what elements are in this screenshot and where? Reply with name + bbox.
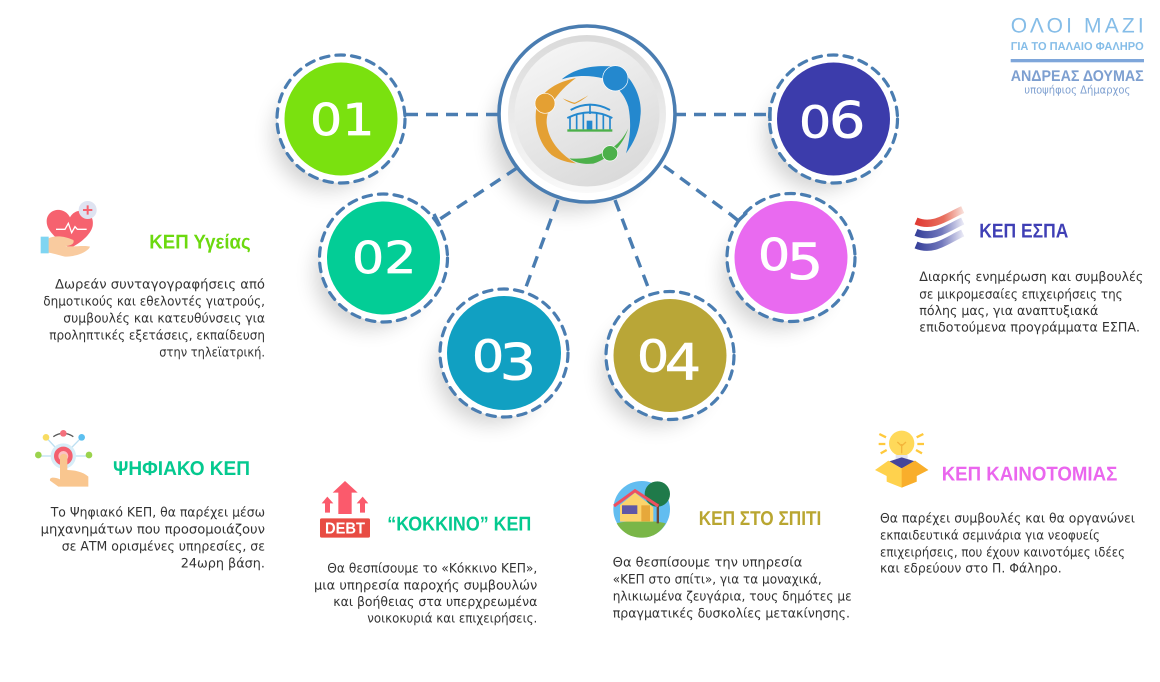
number circle 05: 5 — [787, 233, 823, 291]
text block: πραγματικές δυσκολίες μετακίνησης. — [613, 606, 850, 621]
number circle 04 — [606, 292, 734, 420]
panel: ΚΕΠ ΚΑΙΝΟΤΟΜΙΑΣ — [875, 431, 1135, 577]
central emblem — [499, 26, 675, 202]
text block: μια υπηρεσία παροχής συμβουλών — [314, 578, 537, 593]
panel: ΚΕΠ ΕΣΠΑ — [916, 210, 1143, 336]
heading: ΚΕΠ ΣΤΟ ΣΠΙΤΙ — [699, 508, 821, 530]
icon: finger touching network — [35, 430, 92, 487]
text block: μηχανημάτων που προσομοιάζουν — [41, 522, 265, 538]
icon: house — [613, 481, 670, 538]
icon: debt arrows: DEBT — [325, 520, 365, 537]
number circle 04: 0 — [637, 332, 669, 383]
logo: campaign signature: ΟΛΟΙ ΜΑΖΙ — [1011, 15, 1144, 38]
text block: Διαρκής ενημέρωση και συμβουλές — [919, 270, 1143, 285]
number circle 04: 4 — [665, 334, 701, 392]
number circle 02 — [320, 194, 448, 322]
text block — [314, 562, 537, 627]
number circle 01: 01 — [310, 95, 374, 146]
text block: 24ωρη βάση. — [181, 556, 265, 571]
text block — [880, 512, 1135, 577]
text block: στην τηλεϊατρική. — [159, 346, 265, 361]
text block: σε μικρομεσαίες επιχειρήσεις της — [919, 287, 1123, 302]
icon: circular logo with town hall — [535, 66, 641, 164]
number circle 05 — [727, 194, 855, 322]
text block — [43, 278, 265, 361]
text block: σε ΑΤΜ ορισμένες υπηρεσίες, σε — [62, 540, 265, 555]
connectors — [406, 107, 770, 287]
heading: ΚΕΠ ΚΑΙΝΟΤΟΜΙΑΣ — [942, 464, 1117, 486]
icon: heart in hand — [41, 201, 97, 257]
number circle 02: 02 — [352, 233, 416, 284]
text block: και βοήθειας στα υπερχρεωμένα — [333, 595, 537, 610]
text block — [613, 556, 852, 621]
heading: ΨΗΦΙΑΚΟ ΚΕΠ — [113, 458, 250, 480]
text block: νοικοκυριά και επιχειρήσεις. — [367, 612, 537, 627]
text block: πόλης μας, για αναπτυξιακά — [919, 304, 1098, 319]
text block: συμβουλές και κατευθύνσεις για — [63, 312, 265, 327]
panel: ΨΗΦΙΑΚΟ ΚΕΠ — [35, 430, 265, 571]
text block: προληπτικές εξετάσεις, εκπαίδευση — [49, 329, 265, 344]
text block: Το Ψηφιακό ΚΕΠ, θα παρέχει μέσω — [50, 506, 265, 521]
number circle 06: 06 — [799, 91, 865, 149]
number circle 01 — [277, 55, 405, 183]
heading: ΚΕΠ Υγείας — [149, 231, 251, 253]
number circle 03: 0 — [472, 332, 504, 383]
icon: debt arrows — [320, 481, 370, 538]
logo: campaign signature: υποψήφιος Δήμαρχος — [1024, 83, 1130, 96]
number circle 05: 0 — [758, 230, 790, 281]
panel: ΚΕΠ ΣΤΟ ΣΠΙΤΙ — [613, 481, 852, 621]
text block: επιχειρήσεις, που έχουν καινοτόμες ιδέες — [880, 546, 1125, 561]
text block: «ΚΕΠ στο σπίτι», για τα μοναχικά, — [613, 572, 822, 587]
soft shadows — [273, 60, 873, 426]
text block: επιδοτούμενα προγράμματα ΕΣΠΑ. — [919, 321, 1140, 336]
text block — [41, 506, 265, 571]
logo: campaign signature: ΑΝΔΡΕΑΣ ΔΟΥΜΑΣ — [1011, 68, 1144, 85]
panel: ΚΕΠ Υγείας — [41, 201, 265, 361]
text block: ηλικιωμένα ζευγάρια, τους δημότες με — [613, 590, 852, 605]
text block: Θα παρέχει συμβουλές και θα οργανώνει — [880, 512, 1135, 527]
icon: light bulb in box — [875, 431, 928, 488]
heading: ΚΕΠ ΕΣΠΑ — [979, 221, 1068, 243]
text block: και εδρεύουν στο Π. Φάληρο. — [880, 562, 1062, 577]
text block: Θα θεσπίσουμε την υπηρεσία — [613, 556, 802, 571]
logo: campaign signature — [1011, 15, 1144, 96]
logo: campaign signature: ΓΙΑ ΤΟ ΠΑΛΑΙΟ ΦΑΛΗΡΟ — [1011, 41, 1144, 53]
panel: ΚΟΚΚΙΝΟ ΚΕΠ — [314, 481, 537, 627]
number circle 03: 3 — [500, 334, 536, 392]
heading: “ΚΟΚΚΙΝΟ” ΚΕΠ — [387, 514, 531, 536]
number circle 06 — [770, 55, 898, 183]
number circle 03 — [440, 289, 568, 417]
text block — [919, 270, 1143, 336]
text block: δημοτικούς και εθελοντές γιατρούς, — [43, 295, 265, 310]
text block: Δωρεάν συνταγογραφήσεις από — [55, 278, 265, 293]
text block: Θα θεσπίσουμε το «Κόκκινο ΚΕΠ», — [327, 562, 537, 577]
text block: εκπαιδευτικά σεμινάρια για νεοφυείς — [880, 528, 1100, 543]
icon: waves — [916, 210, 963, 247]
